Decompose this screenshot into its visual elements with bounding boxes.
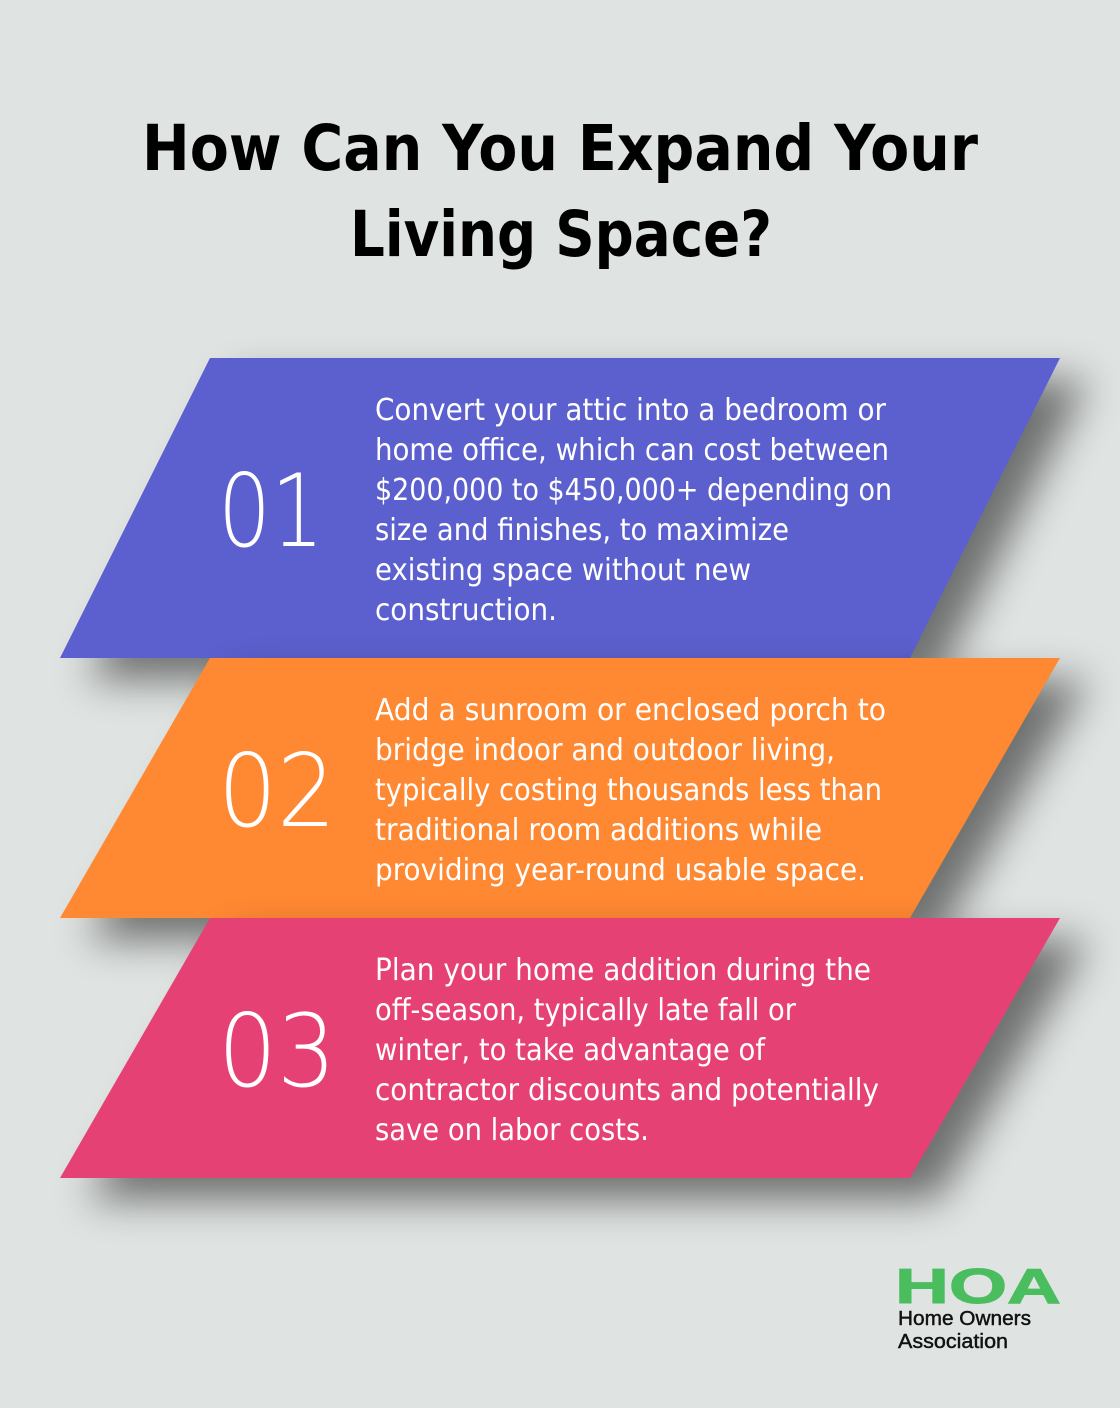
text: step 01 description: Convert your attic into a bedroom or xyxy=(375,393,887,428)
text: step 02 description: bridge indoor and outdoor living, xyxy=(375,733,835,768)
text: step 01 description: existing space without new xyxy=(375,553,751,588)
text: step 03 description: off-season, typically late fall or xyxy=(375,993,797,1028)
logo: HOA Home Owners Association: Home Owners xyxy=(898,1308,1031,1330)
text: step 02 description: traditional room additions while xyxy=(375,813,822,848)
text: step 01 description: $200,000 to $450,000+ depending on xyxy=(375,473,892,508)
number 03: 03 xyxy=(218,992,336,1110)
text: step 01 description: home office, which can cost between xyxy=(375,433,889,468)
title: Living Space? xyxy=(350,198,772,271)
text: step 02 description: typically costing thousands less than xyxy=(375,773,882,808)
number 02: 02 xyxy=(218,732,336,850)
text: step 03 description: save on labor costs. xyxy=(375,1113,649,1148)
number 01: 01 xyxy=(218,452,324,570)
text: step 01 description: size and finishes, to maximize xyxy=(375,513,789,548)
panel: step 02 xyxy=(60,658,1088,940)
text: step 03 description: winter, to take advantage of xyxy=(375,1033,766,1068)
title xyxy=(142,112,978,271)
text: step 02 description: providing year-round usable space. xyxy=(375,853,866,888)
text: step 02 description xyxy=(375,693,886,888)
panel: step 01 xyxy=(60,358,1088,680)
text: step 02 description: Add a sunroom or enclosed porch to xyxy=(375,693,886,728)
text: step 03 description xyxy=(375,953,879,1148)
text: step 03 description: contractor discounts and potentially xyxy=(375,1073,879,1108)
text: step 03 description: Plan your home addition during the xyxy=(375,953,871,988)
logo: HOA Home Owners Association: HOA xyxy=(895,1260,1061,1314)
logo: HOA Home Owners Association xyxy=(895,1260,1061,1353)
logo: HOA Home Owners Association: Association xyxy=(898,1331,1008,1353)
title: How Can You Expand Your xyxy=(142,112,978,185)
text: step 01 description: construction. xyxy=(375,593,557,628)
panel: step 03 xyxy=(60,918,1088,1200)
text: step 01 description xyxy=(375,393,892,628)
